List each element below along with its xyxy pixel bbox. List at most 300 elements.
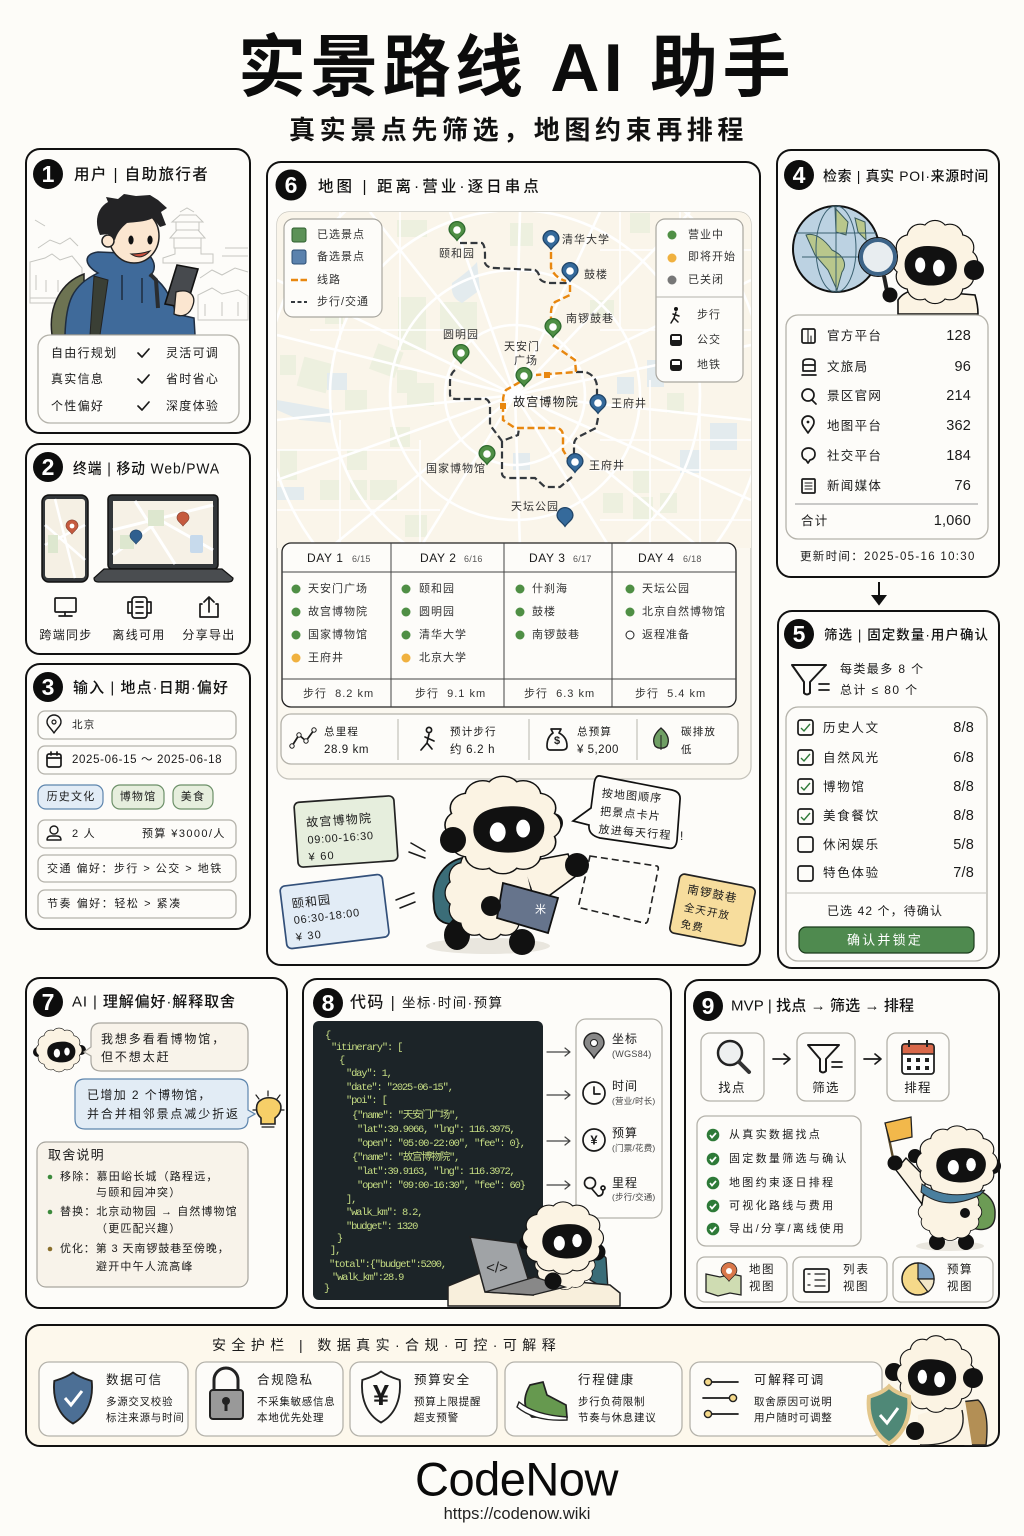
map labels: 天坛公园 bbox=[511, 500, 559, 513]
speech bubble bbox=[573, 776, 685, 848]
card: pace health: 行程健康 bbox=[578, 1372, 635, 1387]
step: find: 找点 bbox=[718, 1081, 746, 1095]
field: mileage: 里程 bbox=[612, 1175, 638, 1190]
row bbox=[802, 478, 971, 494]
map labels: 鼓楼 bbox=[584, 267, 608, 281]
category: 6/8 bbox=[953, 750, 974, 766]
arrow bbox=[864, 1054, 881, 1064]
mascot: sheep with flag bbox=[885, 1117, 1001, 1251]
icon: sync: 跨端同步 bbox=[39, 628, 93, 642]
step: filter: 筛选 bbox=[812, 1080, 840, 1095]
row: 128 bbox=[946, 328, 971, 344]
card: explainable: 可解释可调 bbox=[754, 1373, 825, 1387]
day 1 bbox=[292, 551, 374, 700]
step: schedule: 排程 bbox=[904, 1080, 932, 1095]
feature list: 省时省心 bbox=[166, 372, 219, 386]
field: transport bbox=[38, 855, 236, 882]
day 3: 南锣鼓巷 bbox=[532, 627, 580, 641]
code block: "itinerary": [ bbox=[331, 1042, 402, 1054]
speech bubble: ! bbox=[680, 829, 685, 843]
panel 3: input bbox=[26, 664, 250, 929]
feature list: 灵活可调 bbox=[166, 346, 219, 360]
heading 9: 9 bbox=[702, 993, 714, 1019]
heading 1: 用户 | 自助旅行者 bbox=[74, 166, 209, 184]
code block: "day": 1, bbox=[346, 1068, 392, 1080]
day 1: 王府井 bbox=[308, 650, 344, 664]
day 4: 步行 5.4 km bbox=[635, 687, 706, 700]
day 1: 故宫博物院 bbox=[308, 604, 368, 618]
field: budget: 预算 bbox=[612, 1125, 638, 1140]
legend: status and transit: 营业中 bbox=[688, 227, 724, 241]
heading 3: 3 bbox=[42, 674, 54, 700]
checklist: 导出/分享/离线使用 bbox=[729, 1221, 846, 1235]
view: budget: 预算 bbox=[947, 1262, 973, 1276]
speech bubble: 把景点卡片 bbox=[600, 804, 662, 823]
legend: status and transit: 公交 bbox=[697, 332, 721, 346]
day 3: 什刹海 bbox=[532, 581, 568, 595]
mascot: sheep at laptop: </> bbox=[486, 1260, 508, 1276]
code block: "lat":39.9066, "lng": 116.3975, bbox=[357, 1124, 515, 1136]
icon: share bbox=[182, 597, 236, 642]
panel: safety guardrails bbox=[26, 1325, 999, 1446]
legend: status and transit: 地铁 bbox=[697, 358, 721, 371]
card: explainable: 用户随时可调整 bbox=[754, 1411, 832, 1424]
card: data trust bbox=[39, 1362, 188, 1436]
category: 特色体验 bbox=[823, 865, 880, 880]
card: pace health: 节奏与休息建议 bbox=[578, 1411, 656, 1424]
row: 官方平台 bbox=[827, 328, 882, 343]
row: 新闻媒体 bbox=[827, 478, 882, 493]
row bbox=[802, 359, 971, 375]
stat: distance bbox=[290, 725, 369, 756]
checklist bbox=[697, 1116, 861, 1246]
filter rule: 总计 ≤ 80 个 bbox=[840, 683, 919, 697]
day 2: 颐和园 bbox=[419, 582, 455, 595]
route: selected bbox=[500, 252, 576, 462]
category: 休闲娱乐 bbox=[823, 838, 880, 852]
category: 历史人文 bbox=[823, 720, 880, 735]
chips bbox=[38, 785, 213, 809]
day 1: DAY 1 bbox=[307, 551, 344, 565]
map labels: 国家博物馆 bbox=[426, 461, 486, 475]
stat: budget: $ bbox=[554, 735, 560, 747]
trade-off box bbox=[37, 1142, 248, 1287]
legend: status and transit: 即将开始 bbox=[688, 249, 736, 263]
card: privacy: 本地优先处理 bbox=[257, 1411, 324, 1424]
mascot: sheep with tablet bbox=[396, 777, 589, 955]
day 4: 6/18 bbox=[683, 554, 702, 564]
category: 美食餐饮 bbox=[823, 808, 880, 823]
heading 2: 2 bbox=[42, 454, 54, 480]
feature list: 真实信息 bbox=[51, 371, 104, 386]
code block: "budget": 1320 bbox=[346, 1221, 418, 1233]
phone with map bbox=[42, 495, 88, 582]
code block: "lat":39.9163, "lng": 116.3972, bbox=[357, 1166, 515, 1178]
field: time: 时间 bbox=[612, 1079, 638, 1093]
stat: walking: 预计步行 bbox=[450, 725, 497, 738]
day 2 bbox=[402, 551, 486, 700]
day 4: DAY 4 bbox=[638, 551, 675, 565]
card: data trust: 数据可信 bbox=[106, 1372, 163, 1387]
trade-off box: 取舍说明 bbox=[48, 1148, 105, 1162]
day table bbox=[282, 543, 736, 707]
field: time: (营业/时长) bbox=[612, 1096, 655, 1106]
checklist: 从真实数据找点 bbox=[729, 1127, 822, 1141]
map labels: 圆明园 bbox=[443, 328, 479, 341]
day 4: 天坛公园 bbox=[642, 582, 690, 595]
url: https://codenow.wiki bbox=[444, 1505, 590, 1523]
category: 8/8 bbox=[953, 720, 974, 736]
mascot: sheep at laptop bbox=[448, 1202, 620, 1306]
heading 6: 6 bbox=[285, 172, 297, 198]
code block bbox=[313, 1021, 543, 1300]
card: explainable bbox=[690, 1362, 882, 1436]
card: pace health: 步行负荷限制 bbox=[578, 1395, 645, 1408]
card: forbidden city: 故宫博物院 bbox=[306, 810, 373, 830]
chips: 美食 bbox=[181, 789, 205, 803]
card: summer palace: 06:30-18:00 bbox=[293, 907, 361, 927]
icon: light bulb bbox=[253, 1091, 284, 1127]
bubble: user: 但不想太赶 bbox=[101, 1049, 171, 1064]
mascot: sheep with magnifier bbox=[858, 221, 984, 314]
chips: 博物馆 bbox=[120, 789, 156, 803]
view: list bbox=[793, 1257, 887, 1302]
view: map: 视图 bbox=[749, 1279, 775, 1293]
card: summer palace: 颐和园 bbox=[291, 892, 332, 911]
day 2: 步行 9.1 km bbox=[415, 687, 486, 700]
legend: points and routes: 已选景点 bbox=[317, 228, 365, 241]
field: budget: (门票/花费) bbox=[612, 1143, 655, 1153]
card: budget safety bbox=[350, 1362, 497, 1436]
card: explainable: 取舍原因可说明 bbox=[754, 1395, 832, 1408]
day 2: 圆明园 bbox=[419, 605, 455, 618]
field: pace: 节奏 偏好：轻松 > 紧凑 bbox=[47, 896, 181, 910]
field: date bbox=[38, 746, 236, 774]
title: 实景路线 AI 助手 bbox=[238, 30, 792, 106]
panel 2: device bbox=[26, 444, 250, 654]
checklist: 固定数量筛选与确认 bbox=[729, 1151, 849, 1165]
heading 1: 1 bbox=[42, 161, 55, 187]
code block: "walk_km": 8.2, bbox=[346, 1207, 422, 1219]
map container bbox=[277, 212, 751, 779]
map labels: 清华大学 bbox=[562, 232, 610, 246]
stat: distance: 总里程 bbox=[324, 725, 359, 738]
heading 7: AI | 理解偏好·解释取舍 bbox=[72, 992, 236, 1010]
stat: budget: ¥ 5,200 bbox=[576, 744, 619, 756]
row: 96 bbox=[954, 359, 971, 375]
card: summer palace: ¥ 30 bbox=[294, 929, 323, 944]
field: mileage: (步行/交通) bbox=[612, 1192, 655, 1202]
day 2: 北京大学 bbox=[419, 650, 467, 664]
map labels: 王府井 bbox=[611, 396, 647, 410]
icon: offline bbox=[112, 597, 166, 642]
step: filter bbox=[797, 1033, 855, 1101]
panel 5: filter bbox=[778, 611, 999, 968]
day 2: 6/16 bbox=[464, 554, 483, 564]
stat: carbon: 碳排放 bbox=[681, 725, 716, 738]
heading 9: MVP | 找点 → 筛选 → 排程 bbox=[731, 996, 915, 1014]
total: 1,060 bbox=[934, 513, 971, 529]
field: date: 2025-06-15 ～ 2025-06-18 bbox=[72, 754, 222, 766]
bubble: AI: 已增加 2 个博物馆， bbox=[87, 1087, 212, 1102]
row: 362 bbox=[946, 418, 971, 434]
field list bbox=[576, 1019, 662, 1218]
card: privacy bbox=[196, 1362, 343, 1436]
day 3: 6/17 bbox=[573, 554, 592, 564]
map pins bbox=[449, 222, 606, 526]
category: 自然风光 bbox=[823, 750, 880, 765]
category bbox=[798, 779, 974, 795]
legend: status and transit bbox=[656, 219, 743, 382]
legend: points and routes: 步行/交通 bbox=[317, 294, 369, 308]
day 3: 步行 6.3 km bbox=[524, 687, 595, 700]
legend: points and routes bbox=[284, 219, 382, 317]
row: 地图平台 bbox=[827, 418, 882, 433]
arrows: code to fields bbox=[547, 1048, 570, 1189]
field: people and budget: 2 人 bbox=[72, 827, 96, 840]
trade-off box: 移除：慕田峪长城（路程远， bbox=[60, 1169, 219, 1183]
code block: } bbox=[337, 1233, 343, 1245]
row bbox=[802, 448, 971, 464]
feature list: 个性偏好 bbox=[51, 398, 104, 413]
sketch: landmarks bbox=[30, 208, 248, 320]
panel 1: user bbox=[26, 149, 250, 433]
feature list: 自由行规划 bbox=[51, 345, 118, 360]
field: coordinates: (WGS84) bbox=[612, 1049, 652, 1059]
view: map: 地图 bbox=[749, 1263, 775, 1276]
stat: walking bbox=[421, 725, 497, 756]
row: 214 bbox=[946, 388, 971, 404]
view: list: 视图 bbox=[843, 1279, 869, 1293]
row bbox=[802, 416, 971, 434]
field: coordinates bbox=[584, 1032, 652, 1059]
row bbox=[802, 328, 971, 344]
bubble: user: 我想多看看博物馆， bbox=[101, 1031, 226, 1046]
bubble: user bbox=[84, 1023, 248, 1071]
filter rule: 每类最多 8 个 bbox=[840, 661, 925, 676]
filter rule bbox=[792, 661, 925, 697]
field: transport: 交通 偏好：步行 > 公交 > 地铁 bbox=[47, 861, 222, 875]
card: nanluoguxiang: 全天开放 bbox=[683, 901, 731, 922]
category bbox=[798, 808, 974, 824]
map labels: 天安门 bbox=[504, 339, 540, 353]
laptop with map bbox=[94, 495, 233, 582]
view: map bbox=[697, 1257, 787, 1302]
row: 文旅局 bbox=[827, 359, 868, 374]
card: budget safety: 预算安全 bbox=[414, 1372, 471, 1387]
heading 8: 代码 | bbox=[350, 994, 396, 1012]
code block: "open": "05:00-22:00", "fee": 0}, bbox=[357, 1138, 525, 1150]
field: pace bbox=[38, 890, 236, 918]
legend: status and transit: 已关闭 bbox=[688, 272, 724, 286]
row: 景区官网 bbox=[827, 388, 882, 403]
stat: budget bbox=[547, 725, 619, 756]
heading 8: 8 bbox=[322, 990, 335, 1016]
card: nanluoguxiang: 南锣鼓巷 bbox=[686, 882, 739, 906]
selection status: 已选 42 个，待确认 bbox=[827, 904, 943, 918]
code block: "walk_km":28.9 bbox=[332, 1272, 404, 1284]
day 2: 清华大学 bbox=[419, 627, 467, 641]
mascot: sheep with tablet: 米 bbox=[535, 903, 547, 916]
code block: "open": "09:00-16:30", "fee": 60} bbox=[357, 1180, 526, 1192]
stat: budget: 总预算 bbox=[577, 725, 612, 738]
icon: offline: 离线可用 bbox=[112, 627, 166, 642]
heading 8: 坐标·时间·预算 bbox=[402, 996, 503, 1010]
heading 2 bbox=[33, 452, 220, 482]
code block: "date": "2025-06-15", bbox=[346, 1082, 453, 1094]
code block: { bbox=[325, 1030, 331, 1042]
mascot: head bbox=[33, 1028, 86, 1072]
heading 4: 检索 | 真实 POI·来源时间 bbox=[823, 168, 989, 184]
field: budget bbox=[583, 1125, 655, 1153]
legend: points and routes: 备选景点 bbox=[317, 249, 365, 263]
card: summer palace bbox=[280, 874, 390, 949]
feature list bbox=[38, 335, 239, 423]
heading 5 bbox=[784, 619, 989, 649]
chips: 历史文化 bbox=[47, 789, 95, 803]
category bbox=[798, 750, 974, 766]
trade-off box: 优化：第 3 天南锣鼓巷至傍晚， bbox=[60, 1241, 230, 1255]
summary row bbox=[281, 714, 738, 764]
illustration: traveler bbox=[51, 194, 198, 335]
illustration: globe bbox=[793, 206, 879, 292]
map base bbox=[277, 212, 751, 548]
legend: status and transit: 步行 bbox=[697, 308, 721, 321]
map labels: 广场 bbox=[514, 353, 538, 367]
day 1: 6/15 bbox=[352, 554, 371, 564]
panel 7: AI bbox=[26, 978, 287, 1308]
field: people and budget: 预算 ¥3000/人 bbox=[142, 826, 225, 840]
code block: {"name": "故宫博物院", bbox=[352, 1150, 459, 1164]
card: privacy: 不采集敏感信息 bbox=[257, 1395, 335, 1408]
panel 9: MVP bbox=[685, 980, 1001, 1308]
row: 76 bbox=[954, 478, 971, 494]
step: find bbox=[701, 1033, 764, 1101]
step: schedule bbox=[887, 1033, 949, 1101]
feature list: 深度体验 bbox=[166, 398, 219, 413]
mascot: sheep with shield bbox=[869, 1336, 987, 1445]
view: budget: 视图 bbox=[947, 1279, 973, 1293]
heading 7: 7 bbox=[42, 989, 54, 1015]
heading 3 bbox=[33, 672, 229, 702]
day 4: 北京自然博物馆 bbox=[642, 604, 726, 618]
day 3: 鼓楼 bbox=[532, 604, 556, 618]
field: time bbox=[583, 1079, 655, 1106]
arrow: search to filter bbox=[873, 582, 885, 604]
heading 7 bbox=[33, 987, 236, 1017]
legend: points and routes: 线路 bbox=[317, 272, 341, 286]
code block: "poi": [ bbox=[346, 1095, 387, 1107]
safety heading: 安全护栏 | 数据真实·合规·可控·可解释 bbox=[212, 1337, 558, 1353]
code block: { bbox=[339, 1055, 345, 1067]
day 4: 返程准备 bbox=[642, 627, 690, 641]
trade-off box: （更匹配兴趣） bbox=[96, 1221, 181, 1235]
stat: walking: 约 6.2 h bbox=[450, 742, 495, 756]
speech bubble: 放进每天行程 bbox=[598, 822, 672, 842]
card: budget safety: 超支预警 bbox=[414, 1411, 459, 1424]
card: budget safety: ¥ bbox=[373, 1380, 389, 1412]
heading 9 bbox=[693, 991, 915, 1021]
field: place: 北京 bbox=[72, 718, 95, 731]
card: forbidden city: 09:00-16:30 bbox=[307, 830, 374, 847]
card: forbidden city bbox=[294, 796, 398, 867]
stat: distance: 28.9 km bbox=[324, 744, 369, 756]
row: 社交平台 bbox=[827, 448, 882, 463]
code block: ], bbox=[346, 1194, 356, 1206]
code block: {"name": "天安门广场", bbox=[352, 1108, 459, 1122]
card: budget safety: 预算上限提醒 bbox=[414, 1395, 481, 1408]
row bbox=[802, 388, 971, 404]
card: data trust: 标注来源与时间 bbox=[106, 1411, 184, 1424]
heading 5: 5 bbox=[793, 621, 806, 647]
map labels bbox=[426, 232, 647, 513]
view: list: 列表 bbox=[843, 1262, 870, 1276]
heading 5: 筛选 | 固定数量·用户确认 bbox=[824, 626, 989, 642]
map labels: 故宫博物院 bbox=[513, 394, 579, 409]
card: nanluoguxiang bbox=[669, 873, 756, 947]
heading 6 bbox=[276, 170, 541, 200]
bubble: AI: 并合并相邻景点减少折返 bbox=[87, 1106, 240, 1121]
logo: CodeNow bbox=[415, 1452, 619, 1506]
field: place bbox=[38, 711, 236, 739]
subtitle: 真实景点先筛选，地图约束再排程 bbox=[289, 115, 748, 145]
field: budget: ¥ bbox=[590, 1132, 598, 1148]
panel 6: map bbox=[265, 145, 765, 965]
stat: carbon bbox=[654, 725, 716, 756]
checklist: 地图约束逐日排程 bbox=[729, 1175, 835, 1189]
placeholder slot bbox=[579, 856, 658, 923]
category bbox=[798, 720, 974, 736]
update time: 更新时间：2025-05-16 10:30 bbox=[800, 549, 975, 563]
day 2: DAY 2 bbox=[420, 551, 457, 565]
card: nanluoguxiang: 免费 bbox=[680, 917, 705, 935]
panel 8: code bbox=[303, 979, 671, 1308]
stat: carbon: 低 bbox=[681, 743, 693, 756]
field: coordinates: 坐标 bbox=[612, 1032, 638, 1046]
card: privacy: 合规隐私 bbox=[257, 1372, 314, 1387]
icon: sync bbox=[39, 598, 93, 642]
field: people and budget bbox=[38, 820, 236, 848]
source table bbox=[786, 315, 988, 539]
heading 1 bbox=[33, 159, 209, 189]
heading 4: 4 bbox=[793, 162, 806, 188]
category: 7/8 bbox=[953, 865, 974, 881]
speech bubble: 按地图顺序 bbox=[601, 786, 663, 805]
map labels: 王府井 bbox=[589, 458, 625, 472]
bubble: AI bbox=[75, 1079, 255, 1129]
button bbox=[799, 927, 974, 953]
heading 6: 地图 | 距离·营业·逐日串点 bbox=[318, 178, 541, 196]
category: 8/8 bbox=[953, 779, 974, 795]
checklist: 可视化路线与费用 bbox=[729, 1198, 835, 1212]
view: budget bbox=[893, 1257, 993, 1302]
map labels: 颐和园 bbox=[439, 247, 475, 260]
category: 5/8 bbox=[953, 837, 974, 853]
category list bbox=[786, 707, 987, 961]
day 1: 天安门广场 bbox=[308, 581, 368, 595]
field: mileage bbox=[584, 1175, 655, 1202]
code block: } bbox=[324, 1283, 330, 1295]
day 4 bbox=[626, 551, 726, 700]
card: forbidden city: ¥ 60 bbox=[307, 850, 335, 864]
row: 184 bbox=[946, 448, 971, 464]
category: 博物馆 bbox=[823, 779, 866, 794]
day 3: DAY 3 bbox=[529, 551, 566, 565]
day 1: 国家博物馆 bbox=[308, 627, 368, 641]
heading 3: 输入 | 地点·日期·偏好 bbox=[73, 680, 229, 696]
arrow bbox=[773, 1054, 790, 1064]
icon: share: 分享导出 bbox=[182, 627, 236, 642]
